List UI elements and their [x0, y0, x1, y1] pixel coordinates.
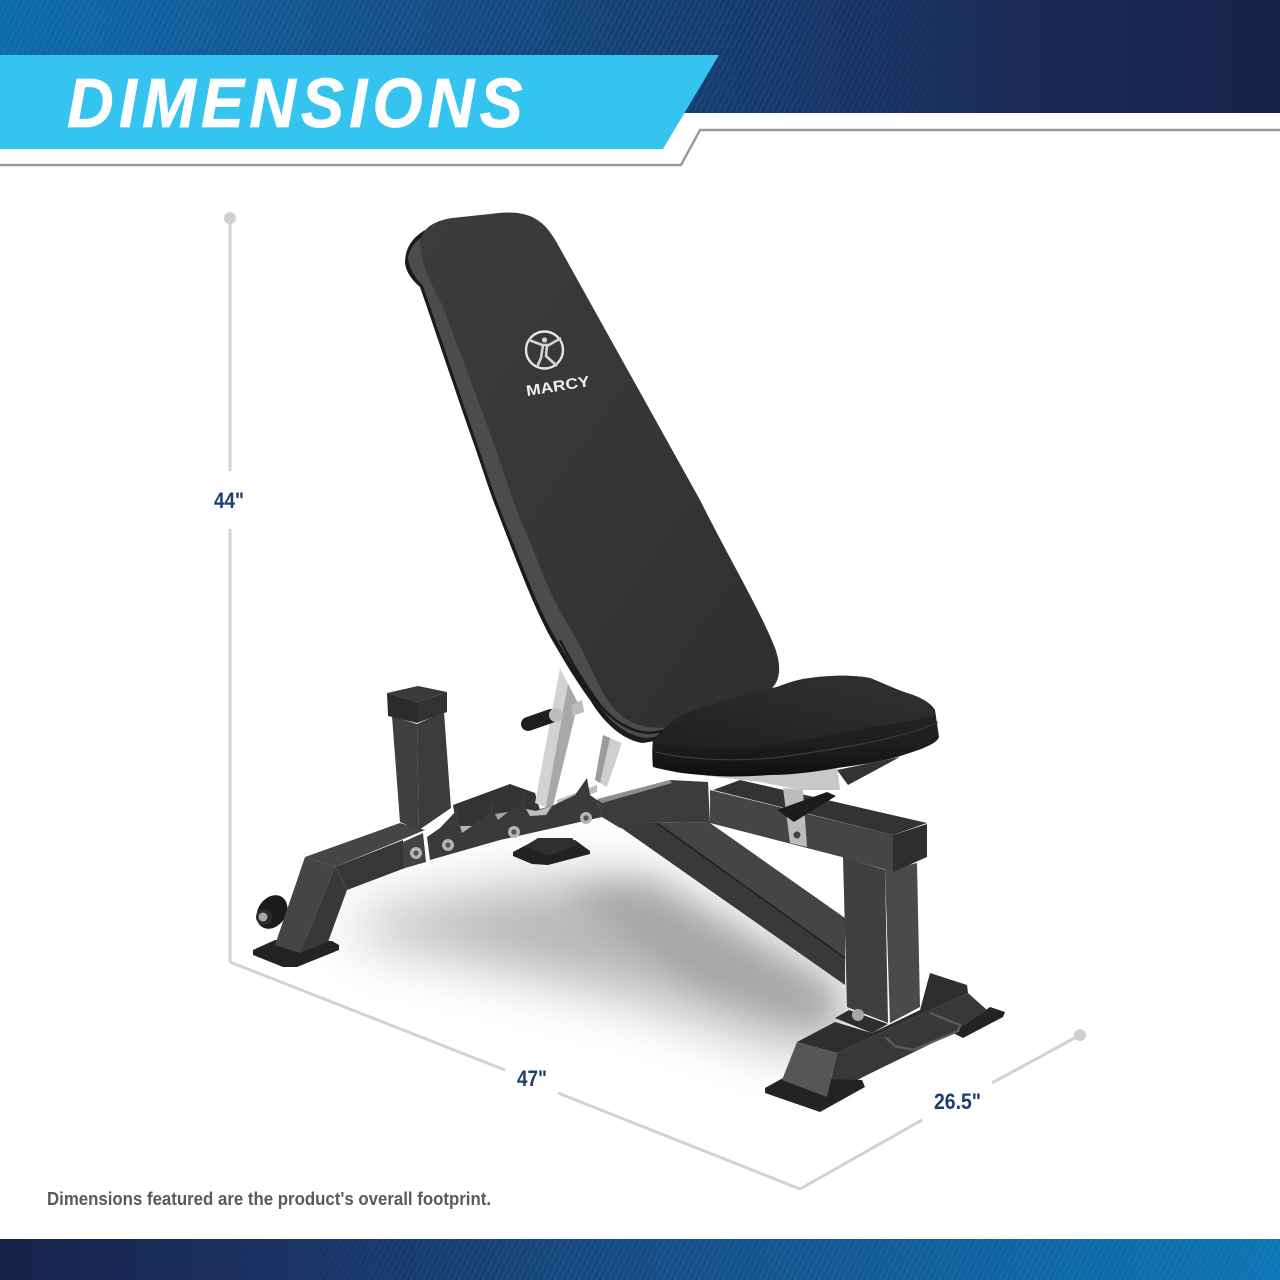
bottom banner [0, 1239, 1280, 1280]
footnote: Dimensions featured are the product's overall footprint. [47, 1189, 491, 1209]
logo [525, 332, 591, 400]
chrome struts [528, 668, 622, 810]
bolts [410, 812, 592, 859]
seat [652, 676, 939, 776]
front post [843, 824, 927, 1023]
seat bracket [673, 757, 900, 847]
floor shadow under bench [350, 875, 850, 1050]
back rest [405, 213, 779, 743]
carry handle [885, 1013, 960, 1050]
back rest face [420, 213, 779, 728]
header outline stroke [0, 130, 1280, 165]
length dimension line [230, 962, 800, 1189]
seat top [653, 676, 935, 748]
diagonal brace and front beam [597, 780, 845, 985]
top banner [0, 0, 1280, 113]
seat support beam [710, 780, 927, 872]
rear post [387, 686, 451, 830]
rear middle foot [513, 838, 590, 865]
bench [250, 213, 1005, 1112]
wheel [250, 889, 294, 935]
front base [797, 973, 1005, 1097]
rear leg [275, 823, 426, 953]
front base details [765, 1009, 960, 1112]
title: DIMENSIONS [67, 65, 523, 143]
rear beam [305, 823, 425, 867]
title ribbon [0, 55, 719, 149]
end cap [782, 1042, 837, 1097]
sawtooth plate [427, 778, 602, 860]
height label: 44" [214, 488, 244, 513]
length label: 47" [517, 1066, 547, 1091]
upper rear beam behind teeth [453, 784, 540, 830]
logo wordmark: MARCY [525, 373, 591, 400]
width dimension line [800, 1029, 1086, 1189]
back rest side [405, 230, 690, 743]
height dimension line [224, 212, 236, 962]
width label: 26.5" [934, 1089, 981, 1114]
back rest band [408, 236, 690, 738]
front foot plate [765, 1078, 865, 1112]
adjustment handle [528, 716, 551, 724]
rear foot plate [253, 940, 339, 967]
seat side [652, 676, 939, 776]
